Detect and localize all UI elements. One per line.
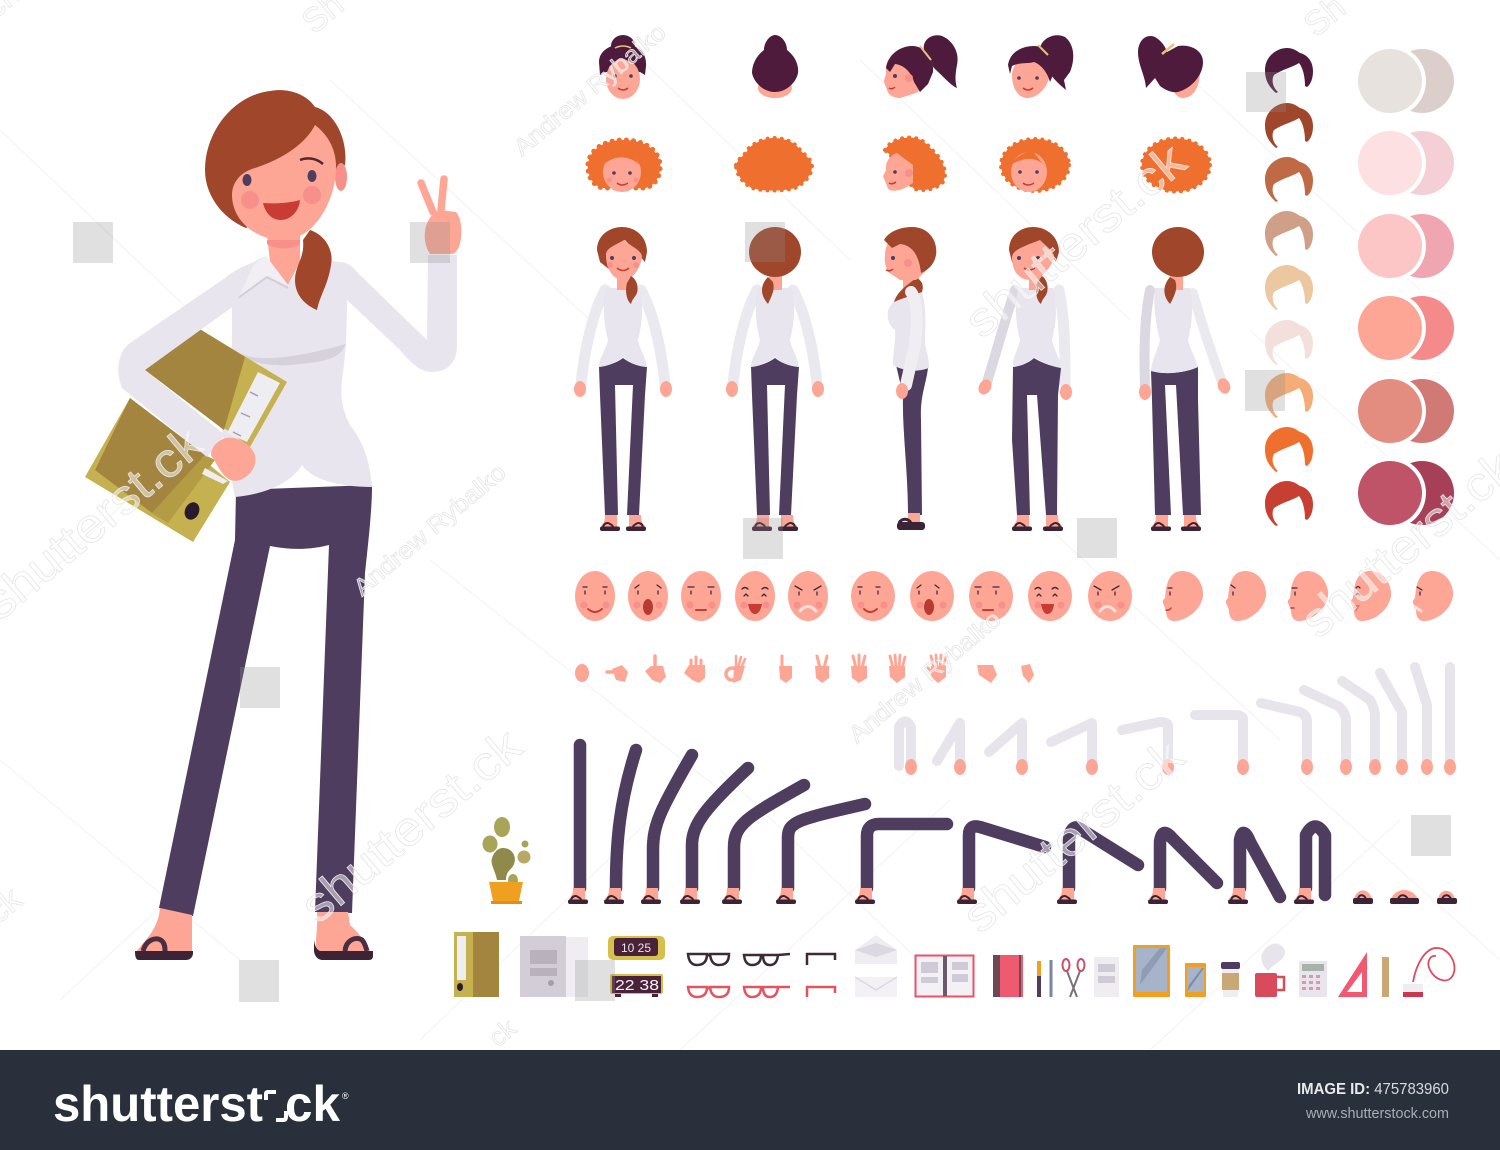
arm poses: sleeves (899, 667, 1450, 766)
hand: pointing sideways (607, 665, 628, 682)
hand: two fingers (815, 656, 829, 683)
main figure: right foot and sandal (314, 912, 373, 960)
main character (85, 90, 461, 960)
item: desk clock: 22 38 (615, 977, 659, 994)
office items row (454, 932, 1455, 997)
item: open envelope (855, 935, 897, 964)
item: pencil (1050, 960, 1052, 997)
hand: index raised (645, 656, 666, 683)
leg poses: feet and sandals (568, 888, 1314, 904)
hair colour swatches (1265, 48, 1313, 526)
footer: website: www.shutterstock.com (1305, 1106, 1449, 1122)
item: ruler (1382, 957, 1389, 997)
facial expressions row (575, 571, 1453, 621)
item: coffee cup (1221, 962, 1240, 997)
main figure: trousers (159, 485, 372, 916)
bent arm poses (899, 667, 1456, 775)
figure: three-quarter view (976, 227, 1072, 531)
item: document box (520, 936, 588, 997)
item: dark glasses (688, 954, 835, 965)
footer bar (0, 1050, 1500, 1150)
hand: one finger (779, 656, 792, 683)
figure: back three-quarter view (1139, 227, 1232, 531)
main figure: ponytail (295, 230, 332, 310)
item: phone (1185, 963, 1206, 997)
footer: shutterstock logo: ck (285, 1076, 340, 1132)
bent leg poses (568, 745, 1457, 904)
hand gestures row (575, 655, 1034, 683)
item: calculator (1299, 961, 1327, 997)
footer: shutterstock logo: shutterst (53, 1076, 263, 1132)
hand: side fist (1021, 664, 1034, 683)
skin and clothing colour swatches (1354, 45, 1454, 529)
head: front ponytail (599, 35, 646, 99)
main figure: face (232, 125, 336, 240)
head: curly back three-quarter (1142, 138, 1210, 192)
main figure: peace-sign hand (421, 179, 461, 254)
watermark text: Andrew Rybalko (509, 19, 671, 162)
head: side (884, 35, 958, 98)
figure: back view (726, 227, 824, 531)
curly orange hair heads row (588, 138, 1210, 192)
watermark tiles (73, 72, 1451, 1002)
head: back (752, 35, 798, 98)
hand: fist (575, 664, 589, 682)
footer: shutterstock logo: ® (342, 1091, 349, 1101)
cactus in pot (482, 817, 530, 904)
item: set square (1338, 952, 1367, 997)
watermark text: Andrew Rybalko (349, 459, 511, 602)
head: curly three-quarter (1001, 139, 1069, 192)
faces: three-quarter expressions (851, 571, 1132, 621)
main figure: ring binder (85, 328, 287, 542)
item: steaming mug (1255, 943, 1285, 997)
item: binder (454, 932, 499, 997)
head: curly side (883, 138, 945, 191)
watermark text: shutterst.ck (953, 729, 1195, 943)
item: desk clock (610, 974, 663, 997)
faces: profile expressions (1163, 571, 1453, 621)
watermark text: Andrew Rybalko (844, 606, 1006, 749)
leg poses: trousers (580, 745, 1325, 897)
head: curly front (588, 140, 660, 192)
arm poses: hands (905, 759, 1456, 775)
main figure: left arm (118, 262, 255, 457)
hand: four fingers (889, 655, 905, 683)
watermark text: shutterst.ck (955, 134, 1197, 348)
hand: open palm angled (684, 657, 705, 683)
head: three-quarter (1008, 35, 1073, 98)
item: pen (1037, 961, 1041, 997)
hand: three fingers (851, 655, 867, 683)
main figure: hair back (205, 90, 345, 228)
hand: five fingers (928, 655, 946, 683)
watermark text: shutterst.ck (291, 719, 533, 933)
hand: OK sign (726, 656, 745, 683)
item: digital watch: 10 25 (621, 941, 651, 955)
main figure: blouse (220, 256, 372, 497)
main figure: right arm (340, 255, 457, 372)
dark hair heads row (599, 35, 1203, 99)
watermark text: ck (483, 1012, 523, 1053)
figure: front view (574, 227, 672, 531)
item: closed envelope (855, 977, 897, 997)
item: digital watch (608, 936, 665, 960)
faces: front expressions (575, 571, 828, 621)
main figure: ear (335, 163, 347, 191)
item: lanyard badge (1403, 948, 1455, 997)
main figure: hand on binder (211, 438, 255, 481)
item: notepad (1094, 957, 1119, 997)
head: back three-quarter (1138, 36, 1203, 98)
item: notebook (993, 955, 1023, 997)
loose feet (1353, 890, 1457, 904)
item: tablet (1133, 945, 1170, 997)
footer: image id: IMAGE ID: 475783960 (1297, 1081, 1449, 1098)
item: scissors (1062, 959, 1084, 997)
main figure: neck (267, 235, 300, 285)
figure: side view (884, 227, 936, 530)
item: open book (916, 956, 974, 996)
main figure: left foot and sandal (135, 908, 193, 960)
figure turnaround row (574, 227, 1232, 531)
item: red glasses (688, 987, 835, 997)
head: curly back (736, 138, 812, 190)
hand: back fist (977, 665, 997, 683)
